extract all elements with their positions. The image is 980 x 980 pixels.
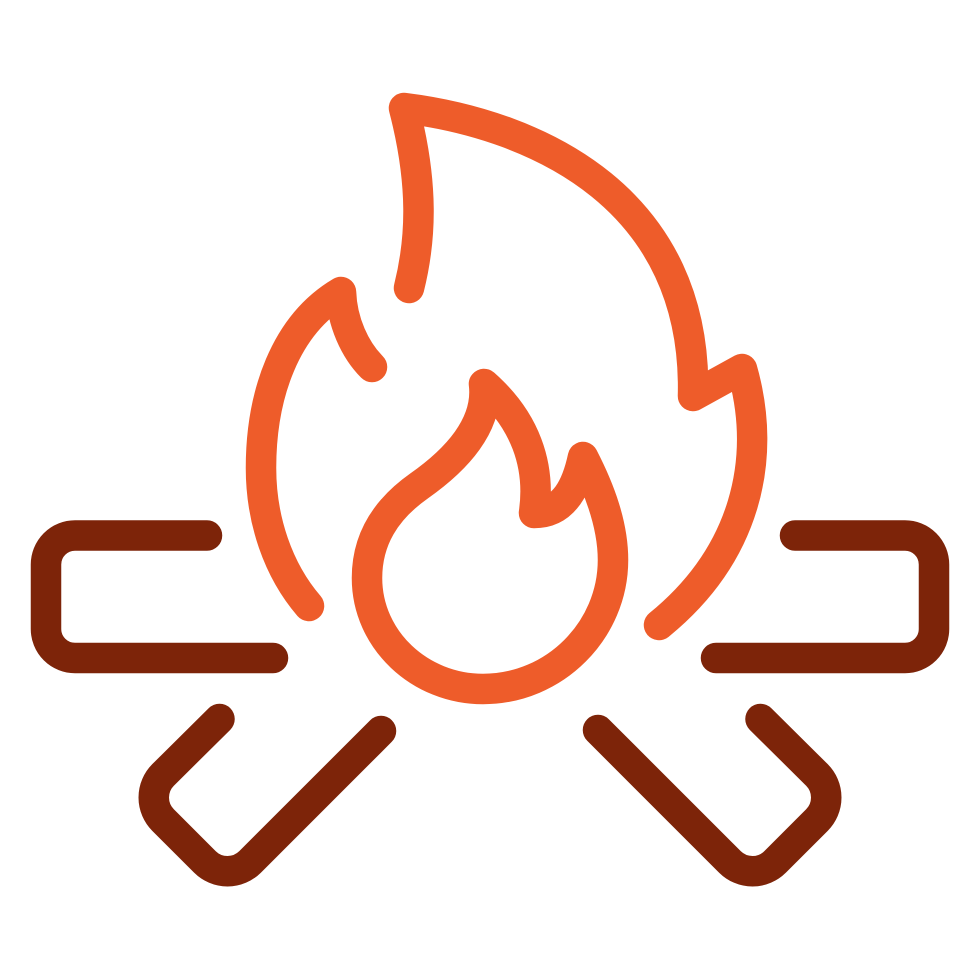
icon: right upper log — [716, 536, 934, 658]
icon: left upper log — [46, 536, 273, 658]
icon: outer flame right — [404, 108, 752, 625]
icon: left lower log — [154, 719, 381, 871]
icon: outer flame left — [261, 292, 372, 606]
icon: right lower log — [598, 719, 826, 871]
icon: inner flame — [367, 384, 613, 689]
